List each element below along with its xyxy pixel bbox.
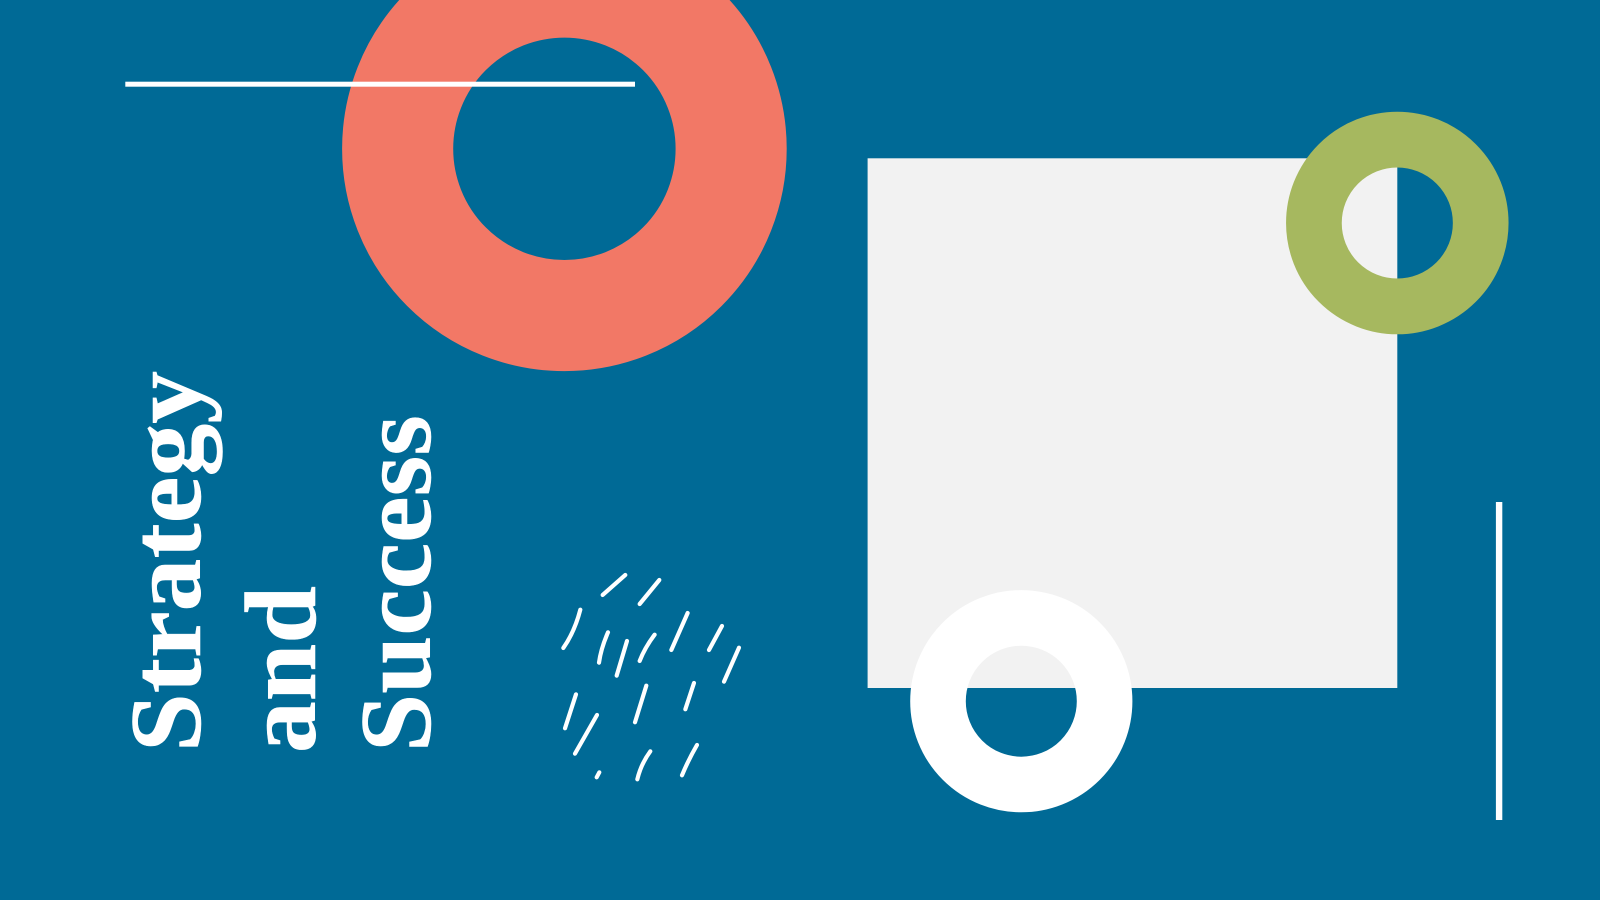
coral ring	[398, 0, 731, 316]
top white rule	[125, 82, 635, 87]
title word: Strategy: Strategy	[110, 371, 223, 752]
title word: Success: Success	[340, 415, 453, 752]
hand-drawn dashes cluster	[563, 575, 739, 779]
white ring	[938, 618, 1105, 784]
light grey square panel	[868, 158, 1397, 688]
right vertical white bar	[1496, 502, 1502, 820]
vertical title	[110, 371, 453, 753]
green ring	[1314, 140, 1481, 306]
title word: and: and	[225, 586, 338, 753]
